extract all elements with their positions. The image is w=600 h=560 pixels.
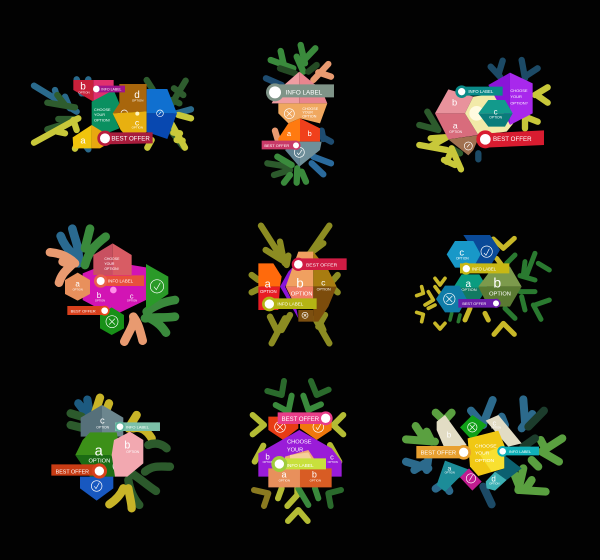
choose your option: CHOOSE	[94, 108, 111, 112]
option a	[65, 273, 90, 301]
option c	[447, 241, 481, 268]
choose your option, purple: OPTION	[263, 460, 273, 464]
magenta hexagon: c	[130, 292, 134, 301]
choose your option, yellow: OPTION	[475, 458, 495, 464]
option b: b	[493, 275, 501, 291]
blue hexagon with cross	[436, 286, 467, 312]
info label: INFO LABEL	[509, 450, 531, 454]
choose your option, purple: b	[265, 452, 270, 461]
choose your option, yellow: YOUR	[475, 451, 490, 457]
grey hexagon with check	[285, 142, 322, 167]
orange hexagon with check	[300, 417, 332, 440]
info label: INFO LABEL	[472, 266, 497, 271]
option c	[113, 111, 147, 140]
option a: OPTION	[88, 458, 110, 464]
glowing center	[465, 93, 513, 135]
best offer label	[97, 131, 153, 146]
option c: OPTION	[317, 288, 331, 292]
snowflake 3	[419, 60, 548, 169]
option c	[486, 415, 522, 447]
option d: OPTION	[132, 98, 143, 102]
option b: b	[452, 97, 457, 107]
option a	[437, 461, 470, 492]
option a: a	[466, 279, 472, 290]
choose your option, purple: CHOOSE	[287, 440, 312, 446]
teal facet	[495, 455, 522, 480]
option d: d	[134, 90, 140, 101]
choose your option, yellow: CHOOSE	[475, 443, 497, 449]
best offer label: BEST OFFER	[56, 469, 89, 475]
snowflake 6	[417, 238, 549, 334]
brown hexagon with check	[448, 135, 480, 155]
option a: OPTION	[279, 479, 290, 483]
red hexagon with cross	[268, 417, 298, 440]
best offer label: BEST OFFER	[264, 143, 289, 148]
panel: snowflake chart 9	[406, 399, 562, 504]
choose your option: OPTION!	[94, 118, 110, 122]
option b: OPTION	[126, 450, 140, 454]
option a	[258, 263, 282, 310]
option b: b	[80, 81, 86, 92]
choose your option, rose: YOUR	[104, 262, 115, 266]
best offer label	[416, 445, 471, 460]
option b: b	[308, 129, 312, 138]
option c: c	[135, 117, 140, 127]
choose your option, orange: CHOOSE	[302, 107, 319, 111]
choose your option, purple: YOUR	[510, 94, 522, 99]
option d: OPTION	[489, 481, 499, 485]
option b: b	[447, 430, 452, 439]
option a: a	[281, 470, 286, 480]
option a: a	[453, 121, 458, 131]
info label: INFO LABEL	[126, 424, 150, 429]
info label: INFO LABEL	[286, 89, 323, 96]
choose your option, purple: YOUR	[287, 447, 303, 453]
option d	[113, 84, 147, 117]
option b	[112, 432, 143, 477]
panel: snowflake chart 5	[252, 226, 347, 343]
option b: b	[312, 470, 317, 480]
choose your option, orange: OPTION	[302, 115, 317, 119]
info label: INFO LABEL	[108, 279, 134, 284]
option a	[435, 113, 478, 139]
magenta hexagon: OPTION	[127, 299, 137, 303]
snowflake 7	[71, 398, 170, 508]
snowflake 4	[50, 229, 175, 342]
panel: snowflake chart 4	[50, 229, 175, 342]
info label: INFO LABEL	[287, 463, 314, 468]
option b: b	[124, 439, 130, 451]
option a: a	[80, 135, 86, 145]
magenta hexagon: OPTION	[95, 299, 105, 303]
green shape with check	[146, 264, 168, 309]
choose your option, rose: CHOOSE	[104, 257, 120, 261]
best offer label: BEST OFFER	[111, 136, 150, 143]
magenta diamond with check	[460, 468, 482, 491]
option a: a	[287, 129, 292, 138]
green diamond with cross	[460, 415, 487, 441]
option a: OPTION	[449, 130, 463, 134]
choose your option, purple: c	[330, 452, 334, 461]
option c: c	[492, 418, 496, 427]
option c: OPTION	[491, 426, 501, 430]
option a	[453, 274, 487, 300]
choose your option, purple: OPTION?	[510, 101, 529, 106]
choose your option, rose: OPTION!	[104, 267, 119, 271]
panel: snowflake chart 7	[51, 398, 170, 508]
best offer label: BEST OFFER	[306, 262, 338, 268]
best offer label: BEST OFFER	[71, 308, 96, 313]
magenta hexagon: b	[97, 291, 102, 300]
choose your option, purple	[488, 73, 533, 125]
green hexagon with cross	[100, 307, 124, 335]
option d: d	[491, 475, 496, 484]
snowflake 8	[253, 381, 343, 521]
info label: INFO LABEL	[277, 302, 304, 307]
snowflake 5	[252, 226, 338, 343]
panel: snowflake chart 6	[417, 235, 549, 334]
option b: OPTION	[310, 479, 321, 483]
option a	[73, 125, 115, 148]
blue shape with check	[80, 477, 113, 501]
option b: OPTION	[489, 292, 511, 298]
choose your option, orange: YOUR	[302, 111, 313, 115]
option a	[268, 468, 300, 487]
panel: snowflake chart 2	[262, 45, 334, 183]
info label: INFO LABEL	[468, 89, 494, 94]
choose your option, purple	[258, 430, 342, 477]
purple chevron	[280, 262, 298, 318]
option c: c	[100, 416, 105, 426]
glowing center	[285, 450, 315, 460]
option a: OPTION	[461, 287, 477, 292]
option c: c	[321, 278, 326, 288]
option b: OPTION	[78, 90, 90, 94]
option b: OPTION	[291, 292, 313, 298]
option a: a	[447, 465, 451, 472]
blue hexagon with check	[147, 89, 177, 139]
option b	[286, 252, 313, 322]
option c: OPTION	[132, 125, 143, 129]
choose your option, rose	[93, 243, 132, 275]
option c: OPTION	[456, 257, 469, 261]
option c: OPTION	[489, 115, 503, 119]
snowflake 9	[406, 399, 562, 504]
option b	[437, 415, 467, 449]
option c: c	[494, 107, 498, 116]
magenta hexagon	[83, 262, 146, 316]
choose your option, purple: CHOOSE	[510, 88, 528, 93]
option b: b	[296, 276, 304, 291]
option a: a	[95, 444, 104, 460]
option c: OPTION	[96, 426, 110, 430]
best offer label: BEST OFFER	[493, 136, 532, 143]
panel: snowflake chart 1	[34, 79, 191, 149]
option c	[81, 405, 123, 437]
option a	[75, 432, 125, 477]
option b	[300, 468, 332, 487]
snowflake 1	[34, 79, 191, 149]
option c	[478, 100, 513, 127]
choose your option, yellow	[468, 431, 504, 476]
snowflake 2	[266, 45, 331, 183]
top blue hexagon with check	[463, 235, 500, 267]
info label	[497, 446, 539, 457]
option b	[478, 267, 522, 307]
choose your option, orange	[278, 103, 327, 123]
option a: OPTION	[73, 287, 83, 291]
option a: OPTION	[445, 471, 455, 475]
option a: a	[265, 279, 272, 291]
option a: a	[75, 280, 80, 289]
best offer label: BEST OFFER	[282, 417, 320, 423]
option a: OPTION	[260, 289, 277, 294]
option b	[73, 80, 114, 102]
best offer label: BEST OFFER	[421, 451, 456, 457]
info label: INFO LABEL	[101, 87, 122, 91]
info label	[93, 86, 125, 92]
choose your option, purple: OPTION	[328, 460, 338, 464]
option d	[486, 472, 507, 491]
choose your option: YOUR	[94, 113, 105, 117]
option c: c	[459, 247, 464, 257]
choose your option	[92, 90, 119, 136]
pink top hexagon	[272, 72, 327, 103]
panel: snowflake chart 3	[419, 60, 548, 169]
panel: snowflake chart 8	[253, 381, 343, 521]
option c	[313, 252, 337, 322]
best offer label: BEST OFFER	[462, 302, 487, 306]
